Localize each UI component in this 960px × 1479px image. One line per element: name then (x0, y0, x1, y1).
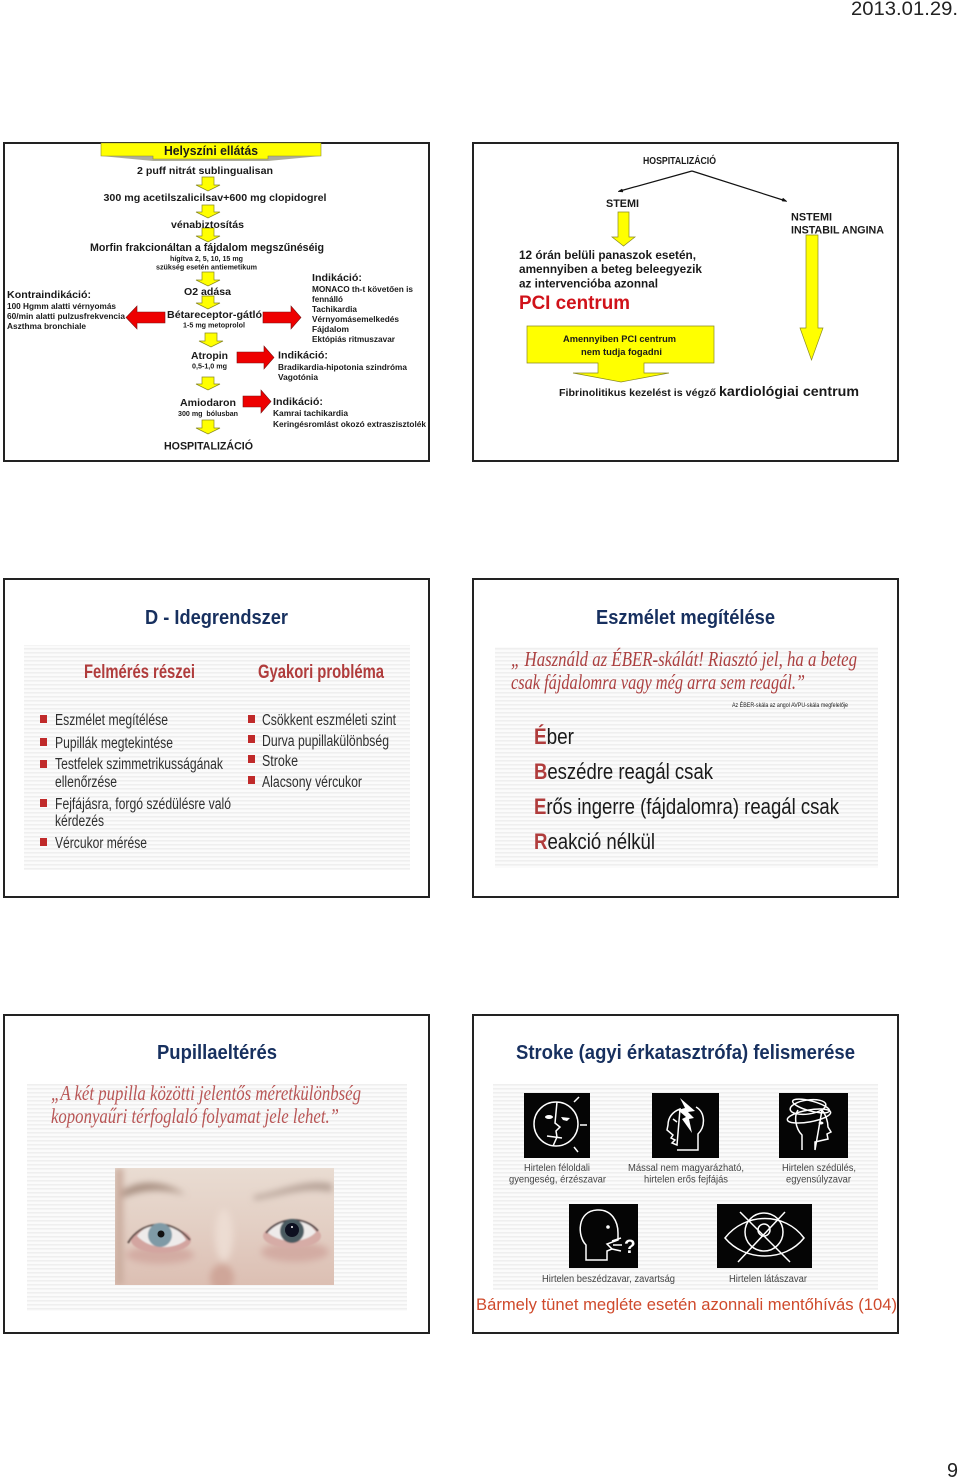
central treatment steps: 1-5 mg metoprolol (183, 322, 245, 330)
heading: HOSPITALIZÁCIÓ (643, 154, 716, 167)
icon: half face weakness (524, 1093, 590, 1158)
yellow flow arrows (196, 177, 223, 434)
icon captions: Hirtelen látászavar (729, 1274, 808, 1285)
central treatment steps: 300 mg bólusban (178, 411, 238, 418)
contraindications: 100 Hgmm alatti vérnyomás (7, 302, 117, 311)
emergency call note: Bármely tünet megléte esetén azonnali mentőhívás (104) (476, 1296, 897, 1314)
contraindications: Kontraindikáció: (7, 289, 91, 301)
panel: D - Idegrendszer (4, 579, 429, 897)
indication: beta blocker: Ektópiás ritmuszavar (312, 335, 395, 344)
list: assessment parts: Eszmélet megítélése (55, 712, 168, 729)
central treatment steps: Morfin frakcionáltan a fájdalom megszűnéséig (90, 242, 324, 254)
central treatment steps: Atropin (191, 350, 228, 362)
icon captions: Hirtelen szédülés, (782, 1163, 856, 1174)
NSTEMI label (791, 212, 884, 236)
list: assessment parts: ellenőrzése (55, 774, 117, 791)
central treatment steps: 0,5-1,0 mg (192, 364, 227, 370)
indication: beta blocker: Tachikardia (312, 305, 358, 314)
ÉBER scale list: Reakció nélkül (534, 829, 655, 854)
panel: Hospitalizáció decision tree (473, 143, 898, 461)
NSTEMI label: NSTEMI (791, 212, 832, 224)
indication: amiodarone (273, 396, 427, 429)
red arrows (126, 306, 301, 413)
icon captions: Hirtelen beszédzavar, zavartság (542, 1274, 675, 1285)
list: assessment parts (40, 712, 231, 852)
indication: beta blocker (312, 272, 414, 344)
quote: „ Használd az ÉBER-skálát! Riasztó jel, ha a beteg (511, 647, 857, 671)
quote: „A két pupilla közötti jelentős méretkülönbség (51, 1081, 361, 1105)
contraindications: 60/min alatti pulzusfrekvencia (7, 312, 126, 321)
icon captions: hirtelen erős fejfájás (644, 1174, 728, 1186)
indication: atropine: Bradikardia-hipotonia szindróma (278, 363, 408, 372)
yellow callout arrow box: Amennyiben PCI centrum (563, 334, 676, 345)
icon captions (509, 1163, 856, 1285)
icon: speech disturbance (569, 1204, 638, 1268)
indication: atropine (278, 350, 408, 382)
panel: Stroke felismerése (473, 1015, 898, 1333)
indication: beta blocker: MONACO th-t követően is (312, 285, 414, 294)
icon captions: Mással nem magyarázható, (628, 1163, 744, 1174)
fibrinolysis line: Fibrinolitikus kezelést is végző (559, 387, 716, 399)
central treatment steps: hígítva 2, 5, 10, 15 mg (170, 256, 243, 263)
slide title: Stroke (agyi érkatasztrófa) felismerése (516, 1042, 855, 1064)
NSTEMI label: INSTABIL ANGINA (791, 224, 884, 236)
indication: beta blocker: Indikáció: (312, 272, 362, 284)
indication: atropine: Vagotónia (278, 373, 319, 382)
fibrinolysis line (559, 384, 859, 399)
quote (51, 1081, 361, 1128)
yellow callout arrow box (527, 326, 714, 382)
column headings: Gyakori probléma (258, 662, 384, 683)
icon captions: Hirtelen féloldali (524, 1163, 590, 1174)
list: assessment parts: Fejfájásra, forgó szédülésre való (55, 796, 231, 813)
icon captions: gyengeség, érzészavar (509, 1174, 607, 1186)
PCI centrum: PCI centrum (519, 293, 630, 314)
indication: beta blocker: fennálló (312, 295, 343, 304)
central treatment steps: vénabiztosítás (171, 219, 244, 231)
icon captions: egyensúlyzavar (786, 1174, 852, 1186)
list: assessment parts: kérdezés (55, 813, 104, 830)
central treatment steps: HOSPITALIZÁCIÓ (164, 440, 253, 452)
column headings (84, 662, 384, 683)
indication: amiodarone: Keringésromlást okozó extraszisztolék (273, 420, 427, 429)
quote: koponyaűri térfoglaló folyamat jele lehet.” (51, 1104, 339, 1128)
panel: Pupillaeltérés (4, 1015, 429, 1333)
slide title: D - Idegrendszer (145, 607, 288, 629)
quote (511, 647, 857, 694)
title banner: Helyszíni ellátás (164, 144, 258, 158)
quote: csak fájdalomra vagy még arra sem reagál.” (511, 670, 805, 694)
icon: visual disturbance (717, 1204, 812, 1268)
panel: Eszmélet megítélése (473, 579, 898, 897)
list: assessment parts: Pupillák megtekintése (55, 735, 173, 752)
STEMI text: az intervencióba azonnal (519, 278, 658, 290)
icon: dizziness (779, 1093, 848, 1158)
indication: amiodarone: Kamrai tachikardia (273, 409, 349, 418)
list: common problems (248, 712, 397, 791)
contraindications: Aszthma bronchiale (7, 322, 87, 331)
photo: eyes with unequal pupils (115, 1168, 334, 1292)
central treatment steps: Amiodaron (180, 397, 236, 409)
indication: atropine: Indikáció: (278, 350, 328, 362)
title banner (101, 143, 321, 161)
STEMI label: STEMI (606, 198, 639, 210)
branch arrows (618, 171, 787, 202)
yellow arrow NSTEMI (800, 235, 823, 360)
list: common problems: Stroke (262, 753, 298, 770)
list: assessment parts: Vércukor mérése (55, 835, 147, 852)
slide title: Pupillaeltérés (157, 1042, 277, 1064)
indication: amiodarone: Indikáció: (273, 396, 323, 408)
yellow arrow STEMI (612, 212, 635, 246)
column headings: Felmérés részei (84, 662, 195, 683)
list: common problems: Csökkent eszméleti szint (262, 712, 397, 729)
icon: speech disturbance: ? (624, 1237, 636, 1258)
STEMI text (519, 250, 703, 290)
fibrinolysis line: kardiológiai centrum (719, 384, 859, 399)
indication: beta blocker: Vérnyomásemelkedés (312, 315, 400, 324)
list: common problems: Alacsony vércukor (262, 774, 362, 791)
panel: Helyszíni ellátás flowchart (4, 143, 429, 461)
ÉBER scale list: Éber (534, 724, 574, 749)
yellow callout arrow box: nem tudja fogadni (581, 347, 662, 358)
central treatment steps: szükség esetén antiemetikum (156, 264, 257, 272)
central treatment steps (90, 165, 327, 452)
icon: sudden headache (652, 1093, 719, 1158)
ÉBER scale list: Erős ingerre (fájdalomra) reagál csak (534, 794, 840, 819)
central treatment steps: 2 puff nitrát sublingualisan (137, 165, 273, 177)
STEMI text: 12 órán belüli panaszok esetén, (519, 250, 696, 262)
list: assessment parts: Testfelek szimmetrikusságának (55, 756, 223, 773)
central treatment steps: Bétareceptor-gátló (167, 309, 262, 321)
central treatment steps: 300 mg acetilszalicilsav+600 mg clopidogrel (104, 192, 327, 204)
ÉBER scale list: Beszédre reagál csak (534, 759, 714, 784)
slide title: Eszmélet megítélése (596, 607, 775, 629)
indication: beta blocker: Fájdalom (312, 325, 349, 334)
central treatment steps: O2 adása (184, 286, 231, 298)
ÉBER scale list (534, 724, 840, 854)
list: common problems: Durva pupillakülönbség (262, 733, 389, 750)
footnote: Az ÉBER-skála az angol AVPU-skála megfelelője (732, 702, 849, 709)
contraindications (7, 289, 126, 331)
STEMI text: amennyiben a beteg beleegyezik (519, 264, 703, 276)
